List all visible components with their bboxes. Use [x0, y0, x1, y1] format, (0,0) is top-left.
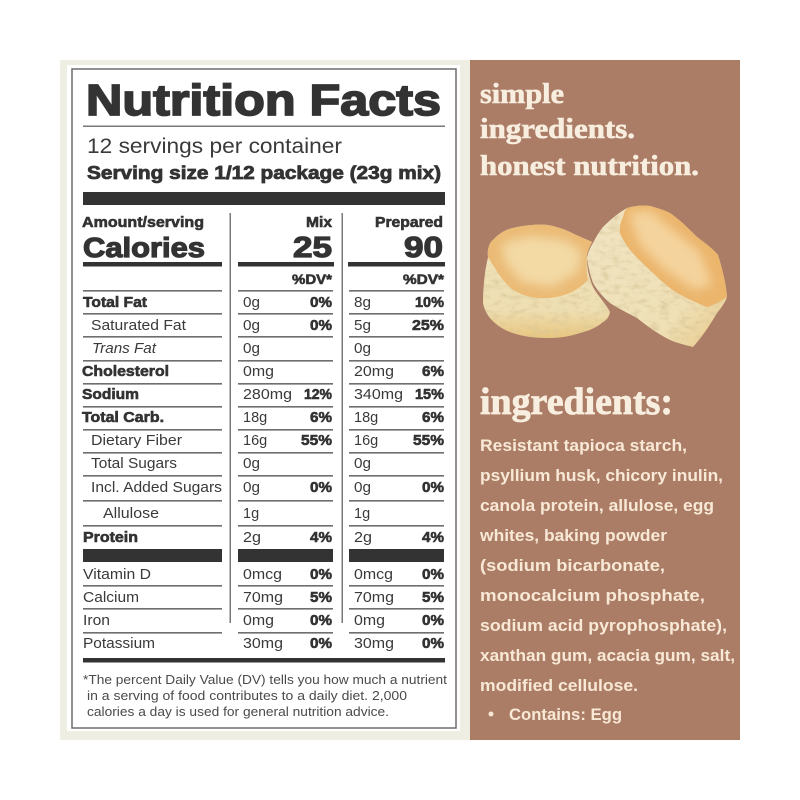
- protein divider bars: [83, 549, 444, 562]
- nutrient rows: 15%: [415, 387, 444, 403]
- nutrient rows: 340mg: [354, 387, 403, 403]
- ingredients list: monocalcium phosphate,: [480, 587, 705, 605]
- nutrient rows: [82, 295, 444, 546]
- vitamin and mineral rows: 70mg: [243, 590, 283, 606]
- nutrient rows: 0g: [354, 341, 371, 357]
- serving size: Serving size 1/12 package (23g mix): [87, 162, 441, 183]
- column headers and calories: Mix: [306, 215, 332, 231]
- ingredients list: [479, 437, 735, 695]
- tagline heading: [480, 79, 699, 182]
- vitamin and mineral rows: 0%: [422, 613, 444, 629]
- nutrient rows: 20mg: [354, 364, 394, 380]
- ingredients list: modified cellulose.: [480, 677, 638, 695]
- nutrient rows: 0g: [354, 480, 371, 496]
- nutrient rows: 0g: [354, 456, 371, 472]
- vitamin and mineral rows: 0mg: [243, 613, 274, 629]
- vitamin and mineral rows: 30mg: [354, 636, 394, 652]
- vitamin and mineral rows: Potassium: [83, 636, 155, 652]
- nutrient rows: 6%: [310, 410, 332, 426]
- vitamin and mineral rows: 0%: [310, 636, 332, 652]
- vitamin and mineral rows: 30mg: [243, 636, 283, 652]
- biscuit right: [587, 200, 730, 347]
- nutrient rows: Trans Fat: [92, 341, 157, 357]
- nutrient rows: 16g: [354, 433, 378, 449]
- ingredients list: whites, baking powder: [479, 527, 668, 545]
- vitamin and mineral rows: [83, 567, 444, 652]
- nutrient rows: Dietary Fiber: [91, 433, 182, 449]
- vitamin and mineral rows: 0mcg: [354, 567, 393, 583]
- vitamin and mineral rows: Vitamin D: [83, 567, 151, 583]
- vitamin and mineral rows: 0%: [310, 613, 332, 629]
- nutrient rows: Total Fat: [83, 295, 147, 311]
- nutrient rows: 0mg: [243, 364, 274, 380]
- nutrient rows: Sodium: [82, 387, 139, 403]
- column headers and calories: Calories: [83, 232, 205, 263]
- vitamin and mineral rows: 70mg: [354, 590, 394, 606]
- nutrient rows: 16g: [243, 433, 267, 449]
- nutrient rows: 6%: [422, 410, 444, 426]
- nutrient rows: 4%: [422, 530, 444, 546]
- column headers and calories: %DV*: [403, 272, 445, 287]
- vitamin and mineral rows: Iron: [83, 613, 110, 629]
- nutrient rows: 10%: [415, 295, 444, 311]
- nutrient rows: Total Carb.: [82, 410, 164, 426]
- nutrient rows: 2g: [243, 530, 261, 546]
- nutrient rows: 5g: [354, 318, 371, 334]
- nutrient rows: 55%: [413, 433, 444, 449]
- column headers and calories: [82, 215, 445, 287]
- vitamin and mineral rows: 0%: [422, 636, 444, 652]
- nutrient rows: 0%: [310, 480, 332, 496]
- nutrient rows: 2g: [354, 530, 372, 546]
- biscuit left: [480, 220, 610, 338]
- allergen note: Contains: Egg: [509, 706, 622, 724]
- nutrient rows: 0%: [422, 480, 444, 496]
- nutrient rows: Total Sugars: [91, 456, 177, 472]
- nutrient rows: 1g: [354, 506, 370, 522]
- icon: biscuits: [480, 200, 730, 347]
- ingredients list: sodium acid pyrophosphate),: [480, 617, 727, 635]
- vitamin and mineral rows: 0mg: [354, 613, 385, 629]
- column headers and calories: %DV*: [292, 272, 333, 287]
- nutrition facts label: [67, 65, 460, 731]
- vitamin and mineral rows: 0mcg: [243, 567, 282, 583]
- daily value footnote: *The percent Daily Value (DV) tells you how much a nutrient: [83, 673, 448, 687]
- ingredients list: (sodium bicarbonate,: [480, 557, 665, 575]
- column headers and calories: 90: [404, 232, 443, 264]
- nutrient rows: 55%: [301, 433, 332, 449]
- nutrient rows: 18g: [354, 410, 378, 426]
- column headers and calories: Amount/serving: [82, 215, 204, 231]
- ingredients list: psyllium husk, chicory inulin,: [480, 467, 723, 485]
- title: Nutrition Facts: [86, 76, 441, 125]
- nutrient rows: 0g: [243, 456, 260, 472]
- nutrient rows: 0g: [243, 341, 260, 357]
- ingredients list: canola protein, allulose, egg: [480, 497, 714, 515]
- nutrient rows: Allulose: [103, 506, 159, 522]
- nutrient rows: 6%: [422, 364, 444, 380]
- nutrient rows: Cholesterol: [82, 364, 169, 380]
- rule lines: [83, 290, 444, 634]
- nutrient rows: 0g: [243, 295, 260, 311]
- nutrient rows: 0%: [310, 318, 332, 334]
- nutrient rows: 0g: [243, 318, 260, 334]
- tagline heading: ingredients.: [480, 114, 635, 145]
- tagline heading: simple: [480, 79, 564, 110]
- vitamin and mineral rows: Calcium: [83, 590, 139, 606]
- column headers and calories: Prepared: [375, 215, 443, 231]
- nutrient rows: 18g: [243, 410, 267, 426]
- daily value footnote: calories a day is used for general nutrition advice.: [87, 705, 389, 719]
- nutrient rows: 1g: [243, 506, 259, 522]
- nutrient rows: Protein: [83, 530, 138, 546]
- ingredients list: Resistant tapioca starch,: [480, 437, 687, 455]
- column headers and calories: 25: [293, 232, 332, 264]
- daily value footnote: [83, 673, 448, 719]
- servings per container: 12 servings per container: [87, 134, 342, 158]
- nutrient rows: 25%: [412, 318, 444, 334]
- ingredients list: xanthan gum, acacia gum, salt,: [480, 647, 735, 665]
- nutrient rows: 0g: [243, 480, 260, 496]
- nutrient rows: 8g: [354, 295, 371, 311]
- vitamin and mineral rows: 5%: [310, 590, 332, 606]
- ingredients heading: ingredients:: [480, 381, 673, 423]
- daily value footnote: in a serving of food contributes to a daily diet. 2,000: [87, 689, 407, 703]
- nutrient rows: 280mg: [243, 387, 292, 403]
- vitamin and mineral rows: 0%: [310, 567, 332, 583]
- column dividers: [230, 213, 343, 623]
- vitamin and mineral rows: 0%: [422, 567, 444, 583]
- ingredients panel background: [470, 60, 740, 740]
- nutrient rows: 4%: [310, 530, 332, 546]
- nutrient rows: Incl. Added Sugars: [91, 480, 222, 496]
- tagline heading: honest nutrition.: [480, 151, 699, 182]
- vitamin and mineral rows: 5%: [422, 590, 444, 606]
- nutrient rows: Saturated Fat: [91, 318, 186, 334]
- nutrition panel background: [60, 60, 470, 740]
- nutrient rows: 12%: [304, 387, 332, 403]
- nutrient rows: 0%: [310, 295, 332, 311]
